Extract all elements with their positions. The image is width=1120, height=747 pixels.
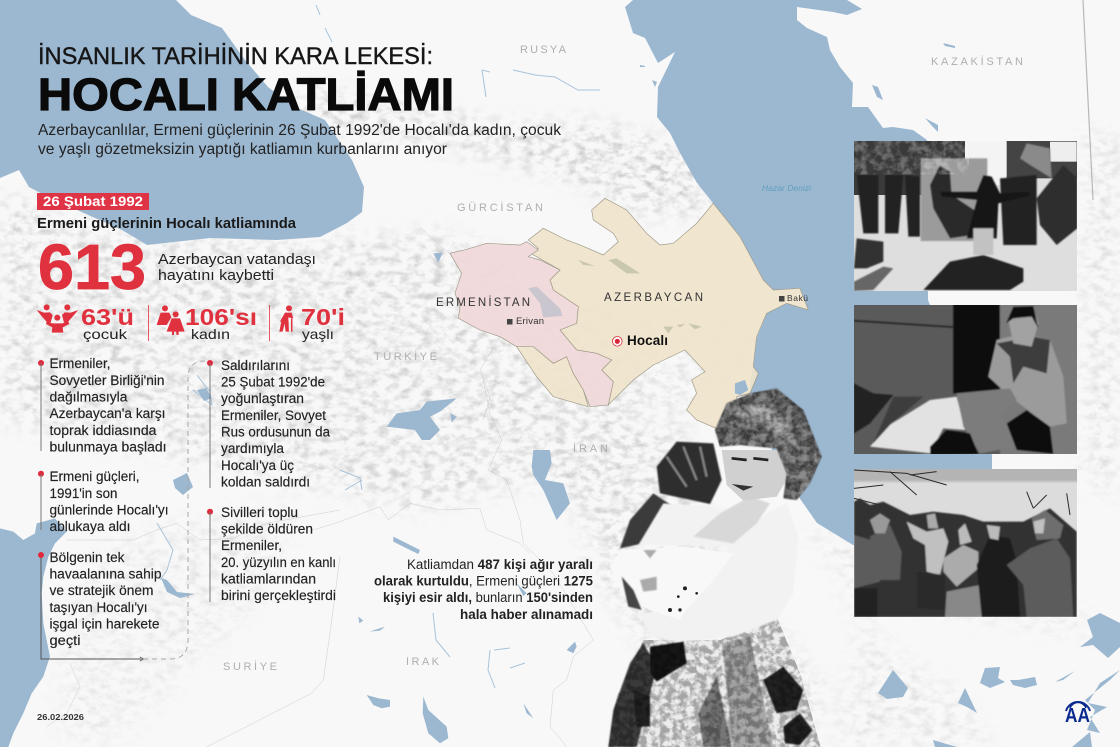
map: Armenia — [433, 242, 613, 407]
callout: wounded and captives: olarak kurtuldu, Ermeni güçleri 1275 — [374, 574, 593, 589]
timeline item: civilians massacred: katliamlarından — [221, 572, 316, 586]
timeline item: territorial claims: toprak iddiasında — [50, 423, 157, 438]
timeline item: territorial claims: dağılmasıyla — [50, 390, 128, 404]
stat: women: kadın — [191, 326, 230, 342]
photo: girl holding a baby — [600, 383, 833, 747]
callout: wounded and captives — [374, 557, 593, 622]
intro text: ve yaşlı gözetmeksizin yaptığı katliamın kurbanlarını anıyor — [38, 141, 447, 158]
map: reservoirs in eastern Turkey — [173, 388, 212, 495]
timeline item: territorial claims: Ermeniler, — [50, 356, 110, 371]
map: Mediterranean Sea — [0, 518, 67, 747]
timeline item: blockade: ablukaya aldı — [50, 519, 130, 534]
stat: elderly — [270, 304, 345, 342]
caption for 613 — [158, 252, 316, 284]
timeline item: territorial claims: bulunmaya başladı — [50, 440, 166, 454]
intro text: Azerbaycanlılar, Ermeni güçlerinin 26 Şubat 1992'de Hocalı'da kadın, çocuk — [38, 122, 561, 139]
map label: Türkiye: TÜRKİYE — [374, 350, 437, 363]
girl: older figure scarf and stripes — [620, 442, 722, 548]
timeline item: blockade: günlerinde Hocalı'yı — [50, 502, 168, 518]
map label: Rusya: RUSYA — [520, 44, 567, 56]
timeline item: advance on the airport — [38, 550, 162, 648]
date badge: 26 Şubat 1992 — [43, 193, 143, 209]
map: Black Sea — [0, 0, 364, 245]
timeline item: civilians massacred: birini gerçekleştirdi — [221, 588, 336, 603]
map: Azerbaijan — [517, 198, 808, 430]
map: lakes of Central Asia — [1080, 613, 1120, 658]
timeline item: three-way attack: koldan saldırdı — [221, 474, 310, 490]
stat: women: 106'sı — [185, 304, 257, 330]
timeline item: advance on the airport: ve stratejik önem — [50, 583, 154, 598]
caption for 613: hayatını kaybetti — [158, 268, 274, 284]
timeline item: three-way attack: Saldırılarını — [221, 358, 290, 373]
map: Caspian Sea — [625, 0, 992, 545]
girl: fur hat — [714, 388, 822, 501]
timeline item: advance on the airport: havaalanına sahip — [50, 566, 162, 582]
stat: elderly: 70'i — [301, 304, 345, 330]
stat: children: çocuk — [83, 326, 128, 342]
subheading: massacre: Ermeni güçlerinin Hocalı katliamında — [37, 216, 297, 232]
intro text — [38, 122, 561, 158]
map label: Kazakistan: KAZAKİSTAN — [931, 55, 1023, 68]
timeline item: three-way attack: Hocalı'ya üç — [221, 458, 294, 473]
map: rivers — [157, 5, 600, 688]
girl: lower body patterned skirts — [607, 619, 820, 747]
timeline item: territorial claims: Sovyetler Birliği'nin — [50, 373, 164, 388]
title: main heading: HOCALI KATLİAMI — [38, 69, 454, 120]
stat: elderly: yaşlı — [302, 326, 334, 342]
timeline item: three-way attack: Ermeniler, Sovyet — [221, 408, 326, 423]
timeline item: three-way attack: yoğunlaştıran — [221, 391, 304, 406]
map label: Gürcistan: GÜRCİSTAN — [457, 201, 543, 214]
timeline item: three-way attack: yardımıyla — [221, 441, 284, 456]
title: first line: İNSANLIK TARİHİNİN KARA LEKESİ: — [38, 43, 433, 70]
timeline item: blockade — [38, 469, 168, 534]
timeline item: blockade: 1991'in son — [50, 486, 118, 501]
timeline item: civilians massacred: 20. yüzyılın en kanlı — [221, 555, 336, 570]
photo: man leaning over a wounded body — [854, 305, 1077, 454]
map label: Erivan with capital marker: Erivan — [516, 316, 544, 327]
photo: memorial at a grave — [854, 141, 1077, 291]
timeline item: three-way attack: 25 Şubat 1992'de — [221, 374, 325, 390]
callout: wounded and captives: hala haber alınamadı — [460, 607, 593, 622]
icon: children — [37, 304, 78, 333]
timeline item: advance on the airport: geçti — [50, 633, 80, 648]
stat: women — [148, 304, 257, 342]
map label: Azerbaycan: AZERBAYCAN — [604, 292, 703, 304]
icon: women — [157, 305, 185, 335]
photo: mourning crowd outdoors — [854, 469, 1077, 617]
stat: children — [37, 304, 134, 342]
girl: patterned baby blanket — [610, 547, 733, 620]
timeline item: advance on the airport: taşıyan Hocalı'yı — [50, 600, 148, 615]
map: lakes of Turkey, Iran and Iraq — [358, 398, 577, 743]
callout: wounded and captives: Katliamdan 487 kişi ağır yaralı — [407, 557, 593, 572]
logo: Anadolu Agency: AA — [1065, 705, 1090, 727]
timeline item: advance on the airport: Bölgenin tek — [50, 550, 125, 565]
map marker: Hocalı: Hocalı — [627, 333, 668, 348]
map label: Hazar Denizi: Hazar Denizi — [762, 183, 812, 193]
timeline item: territorial claims — [38, 356, 166, 454]
timeline item: territorial claims: Azerbaycan'a karşı — [50, 406, 166, 421]
map label: Irak: IRAK — [406, 656, 440, 668]
map label: Bakü with capital marker: Bakü — [787, 293, 808, 303]
map label: Suriye: SURİYE — [223, 660, 277, 673]
map label: Ermenistan: ERMENİSTAN — [436, 296, 530, 309]
timeline item: civilians massacred: şekilde öldüren — [221, 522, 313, 536]
timeline item: three-way attack — [207, 358, 330, 490]
map label: İran: İRAN — [573, 442, 608, 455]
timeline item: civilians massacred: Ermeniler, — [221, 538, 282, 553]
girl: face — [722, 450, 788, 501]
stat: children: 63'ü — [81, 304, 134, 330]
big number: 613: 613 — [38, 231, 146, 303]
callout: wounded and captives: kişiyi esir aldı, bunların 150'sinden — [383, 590, 593, 605]
girl: light torso and sleeve — [638, 497, 798, 642]
timeline item: civilians massacred: Sivilleri toplu — [221, 505, 298, 520]
timeline item: three-way attack: Rus ordusunun da — [221, 424, 330, 440]
map: lakes of Kazakhstan — [872, 85, 883, 100]
date: 26.02.2026 — [37, 712, 84, 722]
icon: elderly person with cane — [279, 305, 293, 332]
timeline connector — [41, 361, 205, 661]
timeline item: blockade: Ermeni güçleri, — [50, 469, 140, 484]
caption for 613: Azerbaycan vatandaşı — [158, 252, 316, 268]
timeline item: advance on the airport: işgal için harekete — [50, 616, 160, 632]
timeline item: civilians massacred — [207, 505, 336, 603]
